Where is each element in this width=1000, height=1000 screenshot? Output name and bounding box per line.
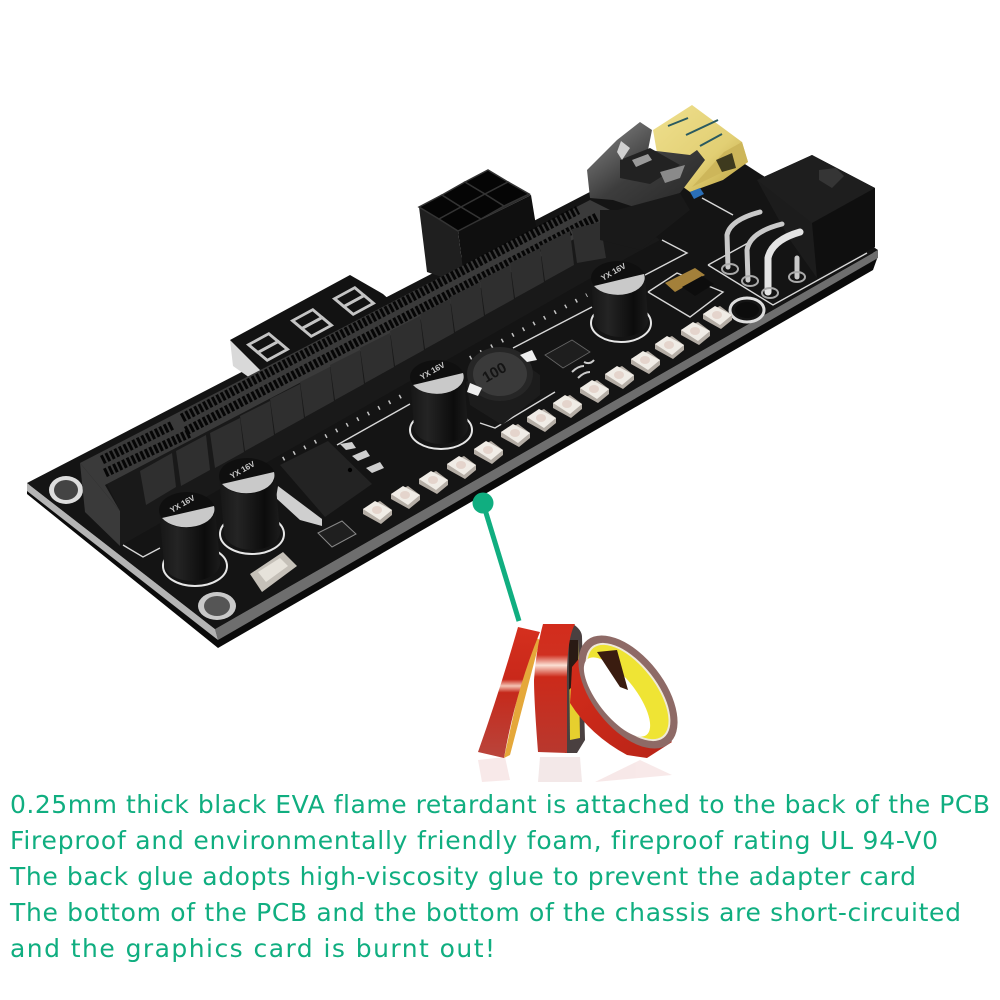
tape roll 3 xyxy=(559,618,697,766)
description text xyxy=(9,790,990,963)
tape roll 1 xyxy=(478,627,540,758)
callout pointer line xyxy=(472,492,519,621)
board top face xyxy=(27,135,878,629)
slot top surface xyxy=(80,200,620,511)
USB port xyxy=(653,105,748,199)
inductor xyxy=(466,347,540,425)
6-pin power connector xyxy=(419,170,540,285)
small 8-pin chip xyxy=(318,521,356,547)
LED 1 xyxy=(363,501,392,524)
tape roll 2 xyxy=(534,624,585,753)
digit 3 xyxy=(335,288,373,314)
LED 3 xyxy=(419,471,448,494)
hole bottom xyxy=(198,592,236,620)
board edge strip xyxy=(215,250,878,640)
inductor: 100 xyxy=(480,359,510,386)
LED 13 xyxy=(681,322,710,345)
capacitor A: YX 16V xyxy=(168,493,197,515)
hole left xyxy=(49,476,83,504)
PCB riser board xyxy=(27,105,878,648)
RGB LED row xyxy=(363,306,732,524)
text line 3: The back glue adopts high-viscosity glue to prevent the adapter card xyxy=(9,862,916,891)
USB plastic clip xyxy=(587,122,705,250)
small control chip xyxy=(545,340,594,378)
LED 4 xyxy=(447,456,476,479)
slot body front xyxy=(105,210,660,546)
LED 7 xyxy=(527,409,556,432)
slot contact rows xyxy=(102,210,597,473)
voltage regulator chip xyxy=(276,441,384,526)
digit 1 xyxy=(249,334,287,360)
LED 8 xyxy=(553,395,582,418)
silkscreen lines xyxy=(123,198,867,557)
socket pins xyxy=(727,212,800,292)
text line 2: Fireproof and environmentally friendly foam, fireproof rating UL 94-V0 xyxy=(10,826,938,855)
hole right xyxy=(730,298,764,322)
board underside edge xyxy=(27,140,878,648)
LED 14 xyxy=(703,306,732,329)
LED 6 xyxy=(501,424,530,447)
LED 9 xyxy=(580,380,609,403)
capacitor C: YX 16V xyxy=(418,360,447,382)
LED 12 xyxy=(655,336,684,359)
text line 5: and the graphics card is burnt out! xyxy=(10,934,495,963)
text line 4: The bottom of the PCB and the bottom of the chassis are short-circuited xyxy=(9,898,961,927)
slot left end xyxy=(80,463,120,546)
power socket block xyxy=(722,155,875,298)
capacitor A xyxy=(159,492,227,586)
fuse component xyxy=(665,268,714,296)
capacitor D xyxy=(591,261,651,342)
mounting holes xyxy=(49,298,764,620)
capacitor C xyxy=(410,360,472,449)
LED 11 xyxy=(631,351,660,374)
text line 1: 0.25mm thick black EVA flame retardant is attached to the back of the PCB xyxy=(10,790,990,819)
capacitor B xyxy=(219,458,284,554)
red tape rolls xyxy=(478,618,697,782)
LED 5 xyxy=(474,441,503,464)
LED 2 xyxy=(391,486,420,509)
slot fins xyxy=(140,222,606,505)
digit 2 xyxy=(293,310,331,336)
solder pads under slot xyxy=(283,295,587,459)
LED display xyxy=(230,275,392,378)
tape reflections xyxy=(478,757,672,782)
LED 10 xyxy=(605,366,634,389)
PCIe slot xyxy=(80,200,660,546)
switch xyxy=(250,552,297,592)
capacitor D: YX 16V xyxy=(600,261,628,283)
capacitor B: YX 16V xyxy=(228,459,257,481)
